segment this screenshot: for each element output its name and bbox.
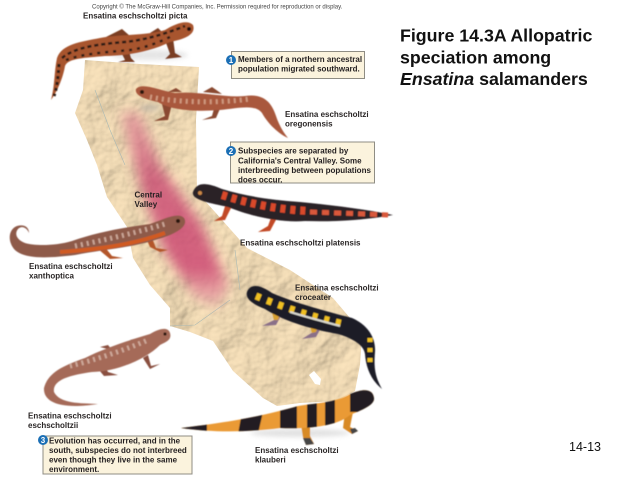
text: eschscholtzii — [28, 421, 78, 430]
label: croceater: Ensatina eschscholtzi — [295, 284, 379, 292]
step 1 callout — [226, 52, 364, 78]
step 3 callout — [38, 435, 192, 474]
label: xanthoptica: Ensatina eschscholtzi — [29, 262, 113, 271]
step 3 callout: environment. — [49, 465, 99, 474]
step 2 callout: does occur. — [238, 176, 282, 185]
label: central valley: Central — [134, 190, 162, 200]
step 2 callout — [226, 142, 374, 185]
salamander: platensis — [193, 184, 393, 232]
text: speciation among — [400, 48, 551, 68]
copyright line: Copyright © The McGraw-Hill Companies, Inc. Permission required for reproduction or display. — [92, 4, 343, 10]
central valley shading — [121, 112, 228, 308]
figure title: Figure 14.3A Allopatric — [400, 26, 592, 46]
salamander: croceater — [246, 285, 382, 390]
salamander: oregonensis — [136, 86, 288, 138]
label: klauberi: Ensatina eschscholtzi — [255, 446, 339, 455]
step 3 callout: 3 — [41, 436, 46, 445]
text: klauberi — [255, 456, 286, 464]
lake — [309, 371, 321, 385]
step 1 callout: population migrated southward. — [238, 64, 360, 74]
step 3 callout: south, subspecies do not interbreed — [49, 446, 187, 455]
step 3 callout: even though they live in the same — [49, 456, 178, 464]
salamander: klauberi — [180, 384, 380, 445]
slide number: 14-13 — [569, 440, 601, 454]
map of California — [75, 60, 362, 406]
text: Valley — [134, 200, 158, 209]
step 2 callout: 2 — [229, 147, 234, 156]
salamander: xanthoptica — [10, 216, 185, 259]
salamander: eschscholtzii — [44, 329, 170, 406]
step 1 callout: 1 — [229, 56, 234, 65]
salamander: picta — [51, 22, 194, 100]
label: oregonensis: Ensatina eschscholtzi — [285, 110, 369, 119]
step 2 callout: Subspecies are separated by — [238, 146, 349, 156]
text: croceater — [295, 293, 331, 302]
text: xanthoptica — [29, 272, 74, 280]
step 2 callout: interbreeding between populations — [238, 166, 371, 175]
step 1 callout: Members of a northern ancestral — [238, 55, 362, 64]
step 3 callout: Evolution has occurred, and in the — [49, 436, 181, 446]
label: platensis: Ensatina eschscholtzi platensis — [240, 238, 361, 248]
step 2 callout: California's Central Valley. Some — [238, 156, 362, 165]
label: picta: Ensatina eschscholtzi picta — [83, 12, 188, 20]
text: oregonensis — [285, 120, 333, 128]
label: eschscholtzii: Ensatina eschscholtzi — [28, 412, 112, 420]
text: Ensatina salamanders — [400, 69, 588, 89]
